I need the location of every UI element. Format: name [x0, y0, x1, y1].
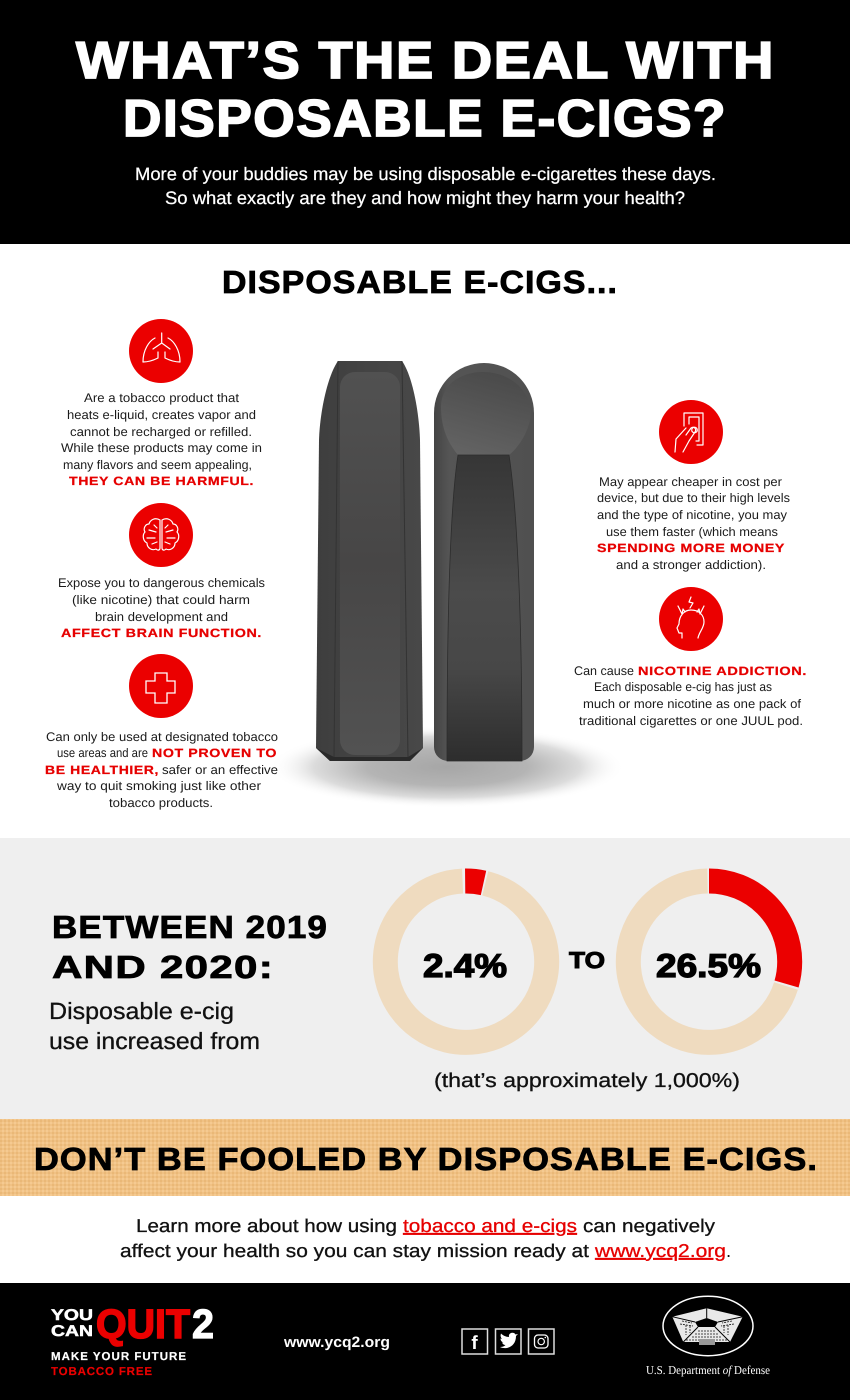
text: not proven healthier: BE HEALTHIER, [45, 763, 159, 777]
logo: you can quit 2: YOU [51, 1307, 93, 1324]
text: nicotine addiction: NICOTINE ADDICTION. [638, 664, 807, 678]
text: not proven healthier [45, 730, 278, 810]
text: spending more money: May appear cheaper in cost per [599, 475, 782, 489]
banner: don't be fooled [0, 1119, 850, 1196]
logo: u.s. department of defense [646, 1296, 770, 1377]
panel: lungs fact [61, 319, 262, 488]
icon: medical cross [129, 654, 193, 718]
panel: learn more: affect your health so you can stay mission ready at [120, 1240, 589, 1261]
device: left side view [316, 361, 423, 761]
text: tobacco product description: cannot be recharged or refilled. [70, 425, 252, 439]
panel: statistics [0, 838, 850, 1119]
subtitle: More of your buddies may be using disposable e-cigarettes these days. [135, 164, 716, 184]
logo: u.s. department of defense: U.S. Department of Defense [646, 1363, 770, 1377]
stat note: (that’s approximately 1,000%) [434, 1070, 740, 1092]
stat description [49, 998, 260, 1054]
panel: learn more: www.ycq2.org [594, 1240, 726, 1261]
stat description: Disposable e-cig [49, 998, 234, 1024]
title: WHAT’S THE DEAL WITH [76, 32, 775, 90]
text: nicotine addiction: Each disposable e-cig has just as [594, 680, 772, 694]
panel: learn more: can negatively [583, 1215, 716, 1236]
text: spending more money: and a stronger addiction). [616, 558, 766, 572]
panel: header [0, 0, 850, 244]
donut chart: 2.4%: 2.4% [423, 947, 507, 984]
image: two disposable e-cig devices [269, 361, 625, 808]
title [76, 32, 775, 148]
panel: footer [0, 1283, 850, 1400]
text: dangerous chemicals: Expose you to dangerous chemicals [58, 576, 265, 590]
footer link: www.ycq2.org [283, 1334, 390, 1351]
text: nicotine addiction: traditional cigarettes or one JUUL pod. [579, 714, 803, 728]
text: dangerous chemicals [58, 576, 265, 640]
text: spending more money: and the type of nicotine, you may [597, 508, 788, 522]
icon: instagram [528, 1329, 554, 1354]
panel: cost fact [597, 400, 790, 572]
stat heading: AND 2020: [52, 949, 274, 985]
icon: facebook [462, 1329, 488, 1354]
text: nicotine addiction: Can cause [574, 664, 634, 678]
text: not proven healthier: use areas and are [57, 746, 148, 760]
text: nicotine addiction [574, 664, 807, 728]
icon: facebook: f [471, 1333, 478, 1354]
text: tobacco product description: heats e-liquid, creates vapor and [67, 408, 256, 422]
icon: twitter [496, 1329, 521, 1354]
donut chart: 26.5% [608, 860, 810, 1063]
label: to: TO [569, 947, 605, 973]
text: spending more money: device, but due to their high levels [597, 491, 790, 505]
text: tobacco product description: THEY CAN BE HARMFUL. [69, 474, 254, 488]
logo: you can quit 2: QUIT [96, 1301, 190, 1347]
text: tobacco product description: many flavors and seem appealing, [63, 458, 252, 472]
text: not proven healthier: way to quit smoking just like other [56, 779, 261, 793]
title: DISPOSABLE E-CIGS? [123, 90, 727, 148]
logo: you can quit 2: MAKE YOUR FUTURE [51, 1351, 186, 1363]
icon: lungs [129, 319, 193, 383]
text: not proven healthier: tobacco products. [109, 796, 213, 810]
panel: brain fact [58, 503, 265, 640]
text: spending more money: SPENDING MORE MONEY [597, 541, 785, 555]
device shadow [269, 726, 625, 808]
banner: don't be fooled: DON’T BE FOOLED BY DISPOSABLE E-CIGS. [34, 1141, 818, 1177]
text: dangerous chemicals: brain development and [95, 610, 228, 624]
logo: you can quit 2: CAN [51, 1323, 93, 1340]
text: dangerous chemicals: AFFECT BRAIN FUNCTION. [61, 626, 262, 640]
panel: learn more [120, 1215, 731, 1261]
text: not proven healthier: NOT PROVEN TO [152, 746, 277, 760]
text: not proven healthier: safer or an effective [162, 763, 278, 777]
text: not proven healthier: Can only be used at designated tobacco [46, 730, 278, 744]
stat heading: BETWEEN 2019 [52, 909, 328, 945]
panel: learn more: . [726, 1240, 731, 1261]
icon: hand holding money [659, 400, 723, 464]
text: dangerous chemicals: (like nicotine) that could harm [72, 593, 250, 607]
text: tobacco product description [61, 391, 262, 488]
panel: learn more: tobacco and e-cigs [403, 1215, 577, 1236]
heading: disposable e-cigs: DISPOSABLE E-CIGS... [222, 264, 618, 300]
text: spending more money [597, 475, 790, 572]
logo: you can quit 2 [51, 1301, 214, 1378]
subtitle: So what exactly are they and how might they harm your health? [165, 188, 685, 208]
logo: you can quit 2: 2 [192, 1301, 214, 1347]
icon: head with lightning [659, 587, 723, 651]
panel: learn more: Learn more about how using [136, 1215, 397, 1236]
icon: brain [129, 503, 193, 567]
stat heading [52, 909, 328, 985]
text: nicotine addiction: much or more nicotine as one pack of [583, 697, 802, 711]
text: tobacco product description: While these products may come in [61, 441, 262, 455]
stat description: use increased from [49, 1028, 260, 1054]
text: spending more money: use them faster (which means [606, 525, 778, 539]
logo: you can quit 2: TOBACCO FREE [51, 1366, 152, 1378]
device: right front view [434, 363, 534, 761]
donut chart: 2.4% [368, 864, 564, 1059]
panel: health fact [45, 654, 278, 810]
text: tobacco product description: Are a tobacco product that [84, 391, 240, 405]
panel: addiction fact [574, 587, 807, 728]
subtitle [135, 164, 716, 208]
donut chart: 26.5%: 26.5% [656, 947, 761, 984]
